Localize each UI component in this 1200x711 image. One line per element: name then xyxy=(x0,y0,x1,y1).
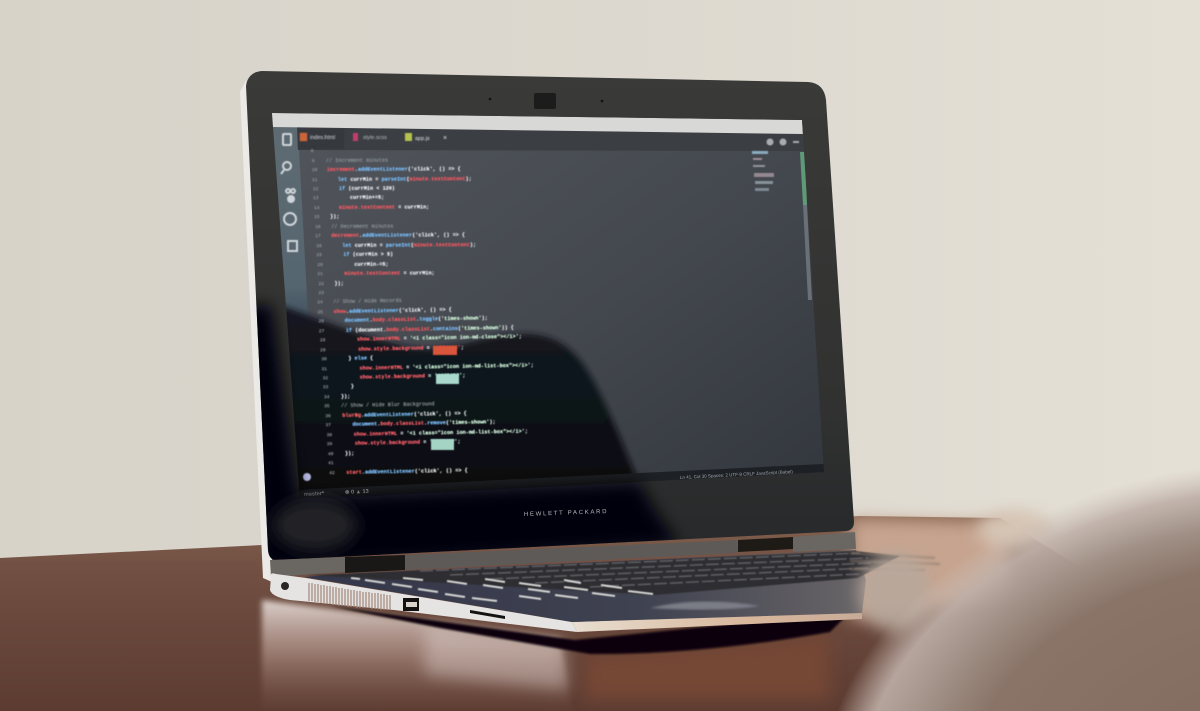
screen: code lines 24 to 43: 35 xyxy=(324,403,330,409)
screen: code lines 8 to 23: 19 xyxy=(316,252,322,258)
laptop: screen with code editor xyxy=(272,113,824,496)
screen: code lines 24 to 43: 26 xyxy=(319,318,324,324)
screen: code lines 24 to 43: 34 xyxy=(324,394,330,400)
screen: code lines 24 to 43: show.addEventListener('click', () => { xyxy=(333,307,452,315)
hinge: left xyxy=(345,555,405,573)
screen: code lines 24 to 43: }); xyxy=(341,394,350,400)
keyboard: right side keys fading xyxy=(850,553,940,570)
screen: minimap xyxy=(752,151,774,191)
wooden table xyxy=(0,516,1200,711)
screen: sidebar xyxy=(272,113,308,318)
screen: code lines 24 to 43: 29 xyxy=(320,347,326,353)
hand: main blurred shape xyxy=(780,440,1200,711)
laptop: webcam xyxy=(489,93,603,109)
screen: code lines 8 to 23: let currMin = parseInt(minute.textContent); xyxy=(338,176,472,183)
screen: code lines 8 to 23: 12 xyxy=(313,186,319,192)
screen: editor background xyxy=(299,114,824,473)
hand: soft corner where table meets wall xyxy=(977,510,1053,550)
screen: code lines 8 to 23: 13 xyxy=(313,195,319,201)
table: shadow under the laptop xyxy=(330,606,850,654)
screen: code lines 8 to 23: }); xyxy=(330,214,339,220)
deck: scuff marks xyxy=(650,601,760,610)
screen: code lines 24 to 43: 25 xyxy=(317,309,323,315)
screen: scrollbar xyxy=(800,152,807,205)
screen: code lines 8 to 23: let currMin = parseInt(minute.textContent); xyxy=(342,242,476,249)
laptop xyxy=(240,71,940,632)
screen: code lines 8 to 23: increment.addEventListener('click', () => { xyxy=(327,166,461,173)
screen: file tabs: × xyxy=(443,135,447,142)
screen: white title bar xyxy=(272,113,803,134)
screen: code lines 24 to 43: } else { xyxy=(348,355,373,362)
screen: code lines 8 to 23: 9 xyxy=(312,158,315,164)
screen: file tabs: style.scss xyxy=(363,135,387,141)
screen: code lines 8 to 23: minute.textContent = currMin; xyxy=(344,270,435,277)
screen: code lines 8 to 23: currMin-=5; xyxy=(354,262,389,268)
wall background xyxy=(0,0,1200,560)
screen: sidebar icons xyxy=(281,134,311,481)
screen: code lines 24 to 43 xyxy=(317,296,536,476)
screen: status bar: Ln 41, Col 30 Spaces: 2 UTF-8 CRLF JavaScript (Babel) xyxy=(680,469,793,480)
screen: code lines 8 to 23: 21 xyxy=(317,271,323,277)
table: white reflection of the laptop xyxy=(262,600,572,711)
screen: code lines 24 to 43: start.addEventListener('click', () => { xyxy=(346,468,468,476)
screen: file tabs: index.html xyxy=(310,135,335,141)
screen: status bar xyxy=(300,464,824,498)
screen: code lines 8 to 23: 14 xyxy=(314,205,320,211)
laptop: speaker vents xyxy=(309,583,390,610)
laptop: palm rest deck xyxy=(304,550,866,622)
screen: code lines 24 to 43: 36 xyxy=(325,413,331,419)
screen: colour value swatches xyxy=(431,346,459,450)
laptop: gold front lip xyxy=(572,612,862,632)
screen: code lines 8 to 23: }); xyxy=(334,281,344,287)
screen: code lines 24 to 43: 33 xyxy=(323,384,329,390)
laptop: lid bezel xyxy=(246,71,854,560)
screen: file tabs: app.js xyxy=(415,136,430,142)
screen: code lines 8 to 23: 20 xyxy=(317,262,323,268)
screen: top right actions xyxy=(766,138,799,146)
screen: code lines 8 to 23: minute.textContent = currMin; xyxy=(339,204,429,211)
screen: code lines 24 to 43: show.style.background = '#E74C3C'; xyxy=(358,345,464,353)
screen: status bar: master* xyxy=(304,491,325,498)
screen: code lines 8 to 23: 22 xyxy=(318,281,324,287)
screen: code lines 8 to 23: 15 xyxy=(314,214,320,220)
screen: code lines 24 to 43: 37 xyxy=(325,422,331,428)
laptop: hinge strip xyxy=(270,532,856,577)
screen: code lines 24 to 43: show.style.background = '#A3E4D7'; xyxy=(360,373,466,381)
screen: code lines 8 to 23: decrement.addEventListener('click', () => { xyxy=(331,232,465,239)
screen: code lines 24 to 43: if (document.body.classList.contains('times-shown')) { xyxy=(346,325,514,334)
screen: code lines 24 to 43: 40 xyxy=(328,451,334,457)
screen: reflected head silhouette xyxy=(286,304,638,490)
table: pale wood to the right of the laptop xyxy=(850,518,1010,620)
table: dark wood streaks xyxy=(585,635,830,700)
screen: code lines 24 to 43: show.innerHTML = '<i class="icon ion-md-close"></i>'; xyxy=(357,334,522,343)
screen: code lines 8 to 23: 17 xyxy=(315,233,321,239)
screen: code lines 24 to 43: show.style.background = '#A3E4D7'; xyxy=(355,439,461,447)
screen: code lines 8 to 23: if (currMin > 5) xyxy=(343,252,393,258)
hinge: right xyxy=(738,537,793,552)
laptop: keyboard xyxy=(307,551,940,601)
screen: code lines 8 to 23: 10 xyxy=(312,167,318,173)
screen: code lines 24 to 43: // Show / Hide Blur Background xyxy=(341,401,435,409)
laptop: silver front edge xyxy=(270,573,577,632)
screen: code lines 8 to 23: 18 xyxy=(316,243,322,249)
screen: code lines 24 to 43: 31 xyxy=(321,366,327,372)
hand: soft blur over the laptop's right end xyxy=(859,552,931,632)
keyboard: key highlights xyxy=(351,578,653,601)
laptop: brand wordmark: HEWLETT PACKARD xyxy=(524,509,608,518)
screen: code lines 24 to 43: 24 xyxy=(317,299,323,305)
screen: code lines 24 to 43: 28 xyxy=(320,337,326,343)
screen: code lines 8 to 23: 11 xyxy=(312,177,318,183)
screen: code lines 8 to 23: 23 xyxy=(318,290,324,296)
screen: code lines 8 to 23: 8 xyxy=(311,148,314,154)
screen: code lines 8 to 23: 16 xyxy=(315,224,321,230)
screen: code lines 24 to 43: 42 xyxy=(329,470,335,476)
screen: code lines 24 to 43: }); xyxy=(345,451,354,457)
screen: code lines 24 to 43: 30 xyxy=(321,356,327,362)
screen: code lines 24 to 43: show.innerHTML = '<i class="icon ion-md-list-box"></i>'; xyxy=(354,429,528,438)
screen: code lines 24 to 43: 27 xyxy=(319,328,325,334)
screen: code lines 24 to 43: // Show / Hide Records xyxy=(333,298,402,305)
blurred foreground hand xyxy=(780,440,1200,711)
table: brighter reflection patch xyxy=(425,625,568,690)
screen: code lines 8 to 23: // Increment minutes xyxy=(326,158,388,164)
screen: file tabs xyxy=(298,132,447,149)
screen: code lines 8 to 23: if (currMin < 120) xyxy=(339,186,395,192)
screen: code lines 24 to 43: 32 xyxy=(323,375,328,381)
laptop: audio jack xyxy=(281,582,289,590)
screen: code lines 24 to 43: 41 xyxy=(328,460,334,466)
laptop: lower bezel reflection xyxy=(240,305,680,570)
keyboard: key grid xyxy=(420,553,872,587)
screen: code lines 24 to 43: document.body.classList.remove('times-shown'); xyxy=(352,419,496,428)
screen: code lines 24 to 43: 38 xyxy=(327,432,332,438)
laptop: silver lid edge xyxy=(240,80,272,582)
screen: status bar: ⊗ 0 ▲ 13 xyxy=(345,489,369,496)
screen: code lines 24 to 43: show.innerHTML = '<i class="icon ion-md-list-box"></i>'; xyxy=(359,363,534,372)
screen: code lines 8 to 23: currMin+=5; xyxy=(350,195,384,201)
screen: code lines 24 to 43: } xyxy=(351,384,354,390)
laptop: SD card slot xyxy=(470,610,505,619)
screen: code lines 24 to 43: 39 xyxy=(327,441,333,447)
screen: code lines 24 to 43: blurBg.addEventListener('click', () => { xyxy=(342,411,467,419)
screen: code lines 24 to 43: document.body.classList.toggle('times-shown'); xyxy=(345,315,488,324)
laptop: USB port xyxy=(403,598,419,611)
screen: code lines 8 to 23: // Decrement minutes xyxy=(331,224,393,230)
screen: tab bar xyxy=(297,127,804,151)
screen: code lines 8 to 23 xyxy=(311,147,476,296)
